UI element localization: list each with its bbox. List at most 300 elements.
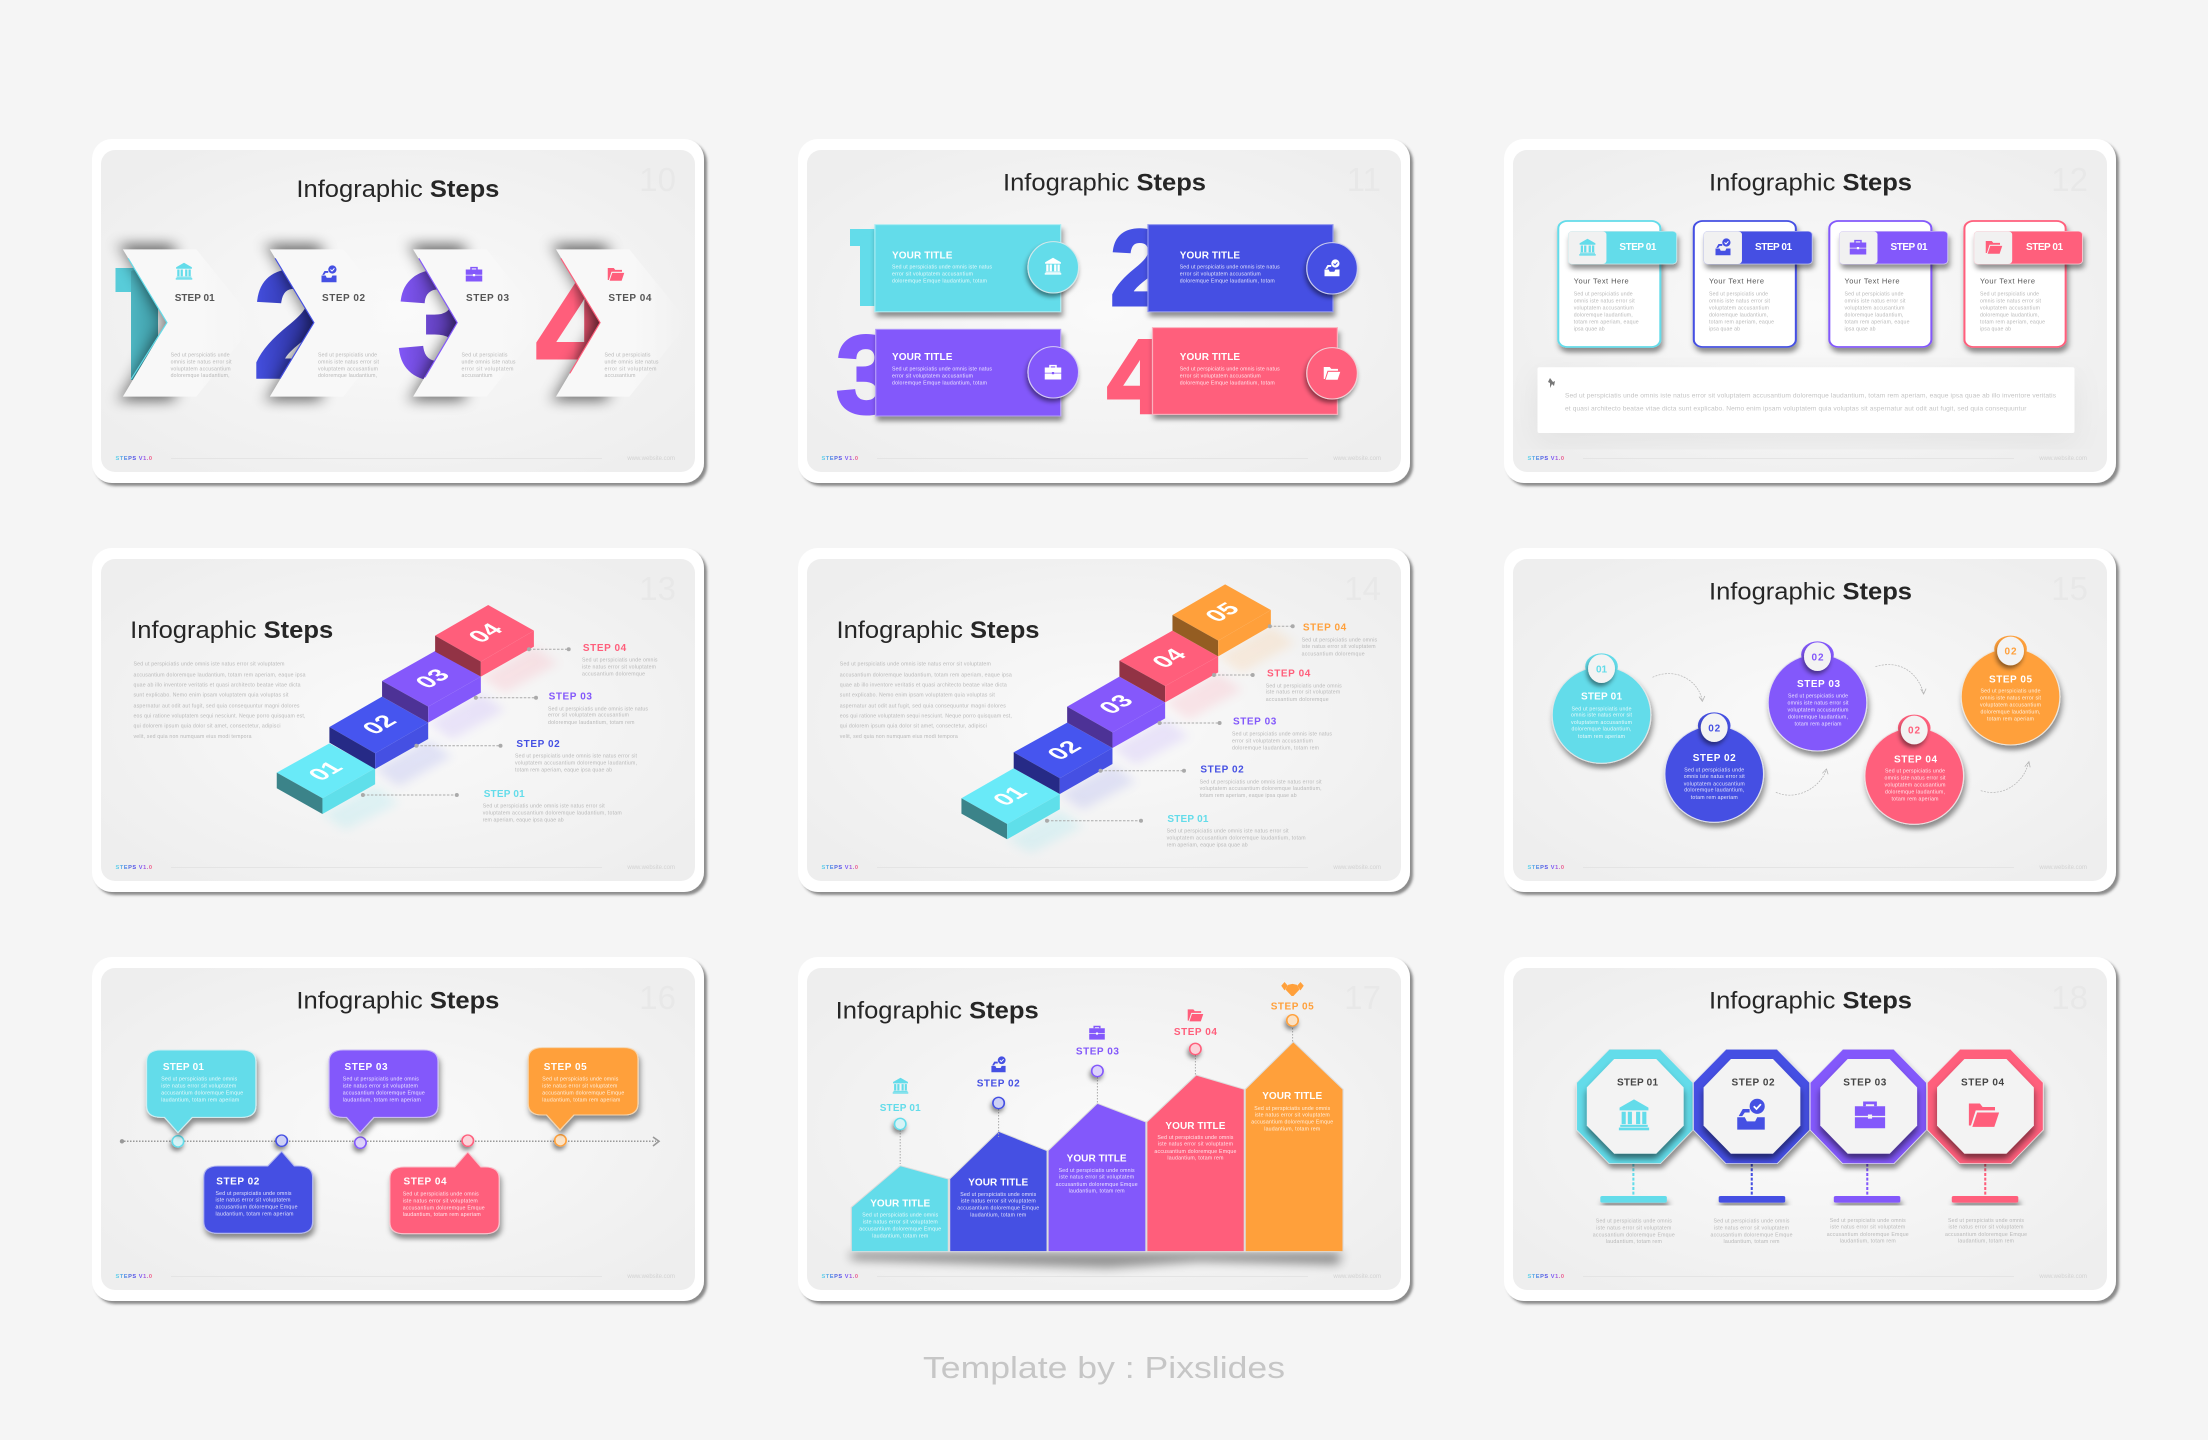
- panel: slide 14 isometric 5 steps: [798, 548, 1410, 892]
- circle 5: [1961, 636, 2060, 745]
- step 1 chevron: 1: [89, 233, 191, 439]
- step 3 chevron: [397, 240, 546, 411]
- step labels: STEP 03: [1233, 717, 1277, 728]
- box 4: error sit voluptatem accusantium: [1180, 373, 1261, 379]
- card frame: www.website.com: [2038, 865, 2087, 871]
- pins: [894, 1015, 1298, 1164]
- box 1: doloremque Emque laudantium, totam: [892, 279, 987, 285]
- callout step 05: STEP 05: [544, 1062, 587, 1073]
- step card 3: STEP 01: [1890, 242, 1928, 253]
- intro paragraph: quae ab illo inventore veritatis et quasi architecto beatae vitae dicta: [134, 682, 301, 688]
- step card 2: ipsa quae ab: [1709, 326, 1740, 332]
- step 2 chevron: omnis iste natus error sit: [318, 360, 380, 366]
- step 02 labels: iste natus error sit voluptatem: [961, 1199, 1036, 1205]
- step card 4: STEP 01: [2026, 242, 2063, 253]
- circle 5: totam rem aperiam: [1987, 717, 2034, 723]
- octagon 4: [1927, 1049, 2043, 1245]
- callout step 03: iste natus error sit voluptatem: [343, 1084, 418, 1090]
- step 03 labels: laudantium, totam rem: [1069, 1189, 1125, 1195]
- circle 3: omnis iste natus error sit: [1788, 701, 1849, 707]
- box 3: 3: [836, 314, 897, 437]
- step 01 labels: laudantium, totam rem: [872, 1234, 928, 1240]
- box 4: 4: [1107, 319, 1165, 436]
- circle 2: STEP 02: [1693, 753, 1736, 764]
- octagon 2: laudantium, totam rem: [1724, 1239, 1780, 1245]
- card frame: [798, 548, 1410, 892]
- callout step 05: laudantium, totam rem aperiam: [542, 1098, 620, 1104]
- step card 3: ipsa quae ab: [1844, 326, 1876, 332]
- step 1 chevron: STEP 01: [175, 293, 215, 304]
- intro paragraph: sunt explicabo. Nemo enim ipsam voluptatem quia voluptas sit: [840, 693, 995, 699]
- panel: slide 17 rising houses: [798, 957, 1410, 1301]
- callout step 01: iste natus error sit voluptatem: [161, 1084, 236, 1090]
- panel: slide 16 timeline callouts: [92, 957, 704, 1301]
- isometric staircase: 04: [463, 620, 510, 647]
- panel: slide 18 octagons: [1504, 957, 2116, 1301]
- step card 3: Sed ut perspiciatis unde: [1844, 292, 1904, 298]
- octagon 1: [1577, 1049, 1693, 1245]
- card frame: www.website.com: [2038, 1274, 2087, 1280]
- step 03 labels: accusantium doloremque Emque: [1056, 1182, 1138, 1188]
- step labels: totam rem aperiam, eaque ipsa quae ab: [1200, 793, 1297, 799]
- step card 2: omnis iste natus error sit: [1709, 299, 1771, 305]
- panel: slide 15 circles: [1504, 548, 2116, 892]
- isometric staircase: 02: [357, 711, 403, 738]
- step labels: accusantium doloremque: [582, 672, 645, 678]
- octagon 4: STEP 04: [1961, 1077, 2004, 1088]
- step 2 chevron: [252, 239, 402, 410]
- circle 3: doloremque laudantium,: [1788, 714, 1848, 720]
- circle 4: doloremque laudantium,: [1885, 789, 1945, 795]
- circle 3: Sed ut perspiciatis unde: [1788, 694, 1848, 700]
- timeline: [120, 1137, 659, 1146]
- box 1: 1: [831, 206, 902, 349]
- circle 2: Sed ut perspiciatis unde: [1684, 767, 1744, 773]
- step labels: STEP 04: [1267, 668, 1311, 679]
- isometric staircase: 01: [303, 758, 349, 785]
- box 2: [1110, 207, 1357, 328]
- octagon 3: accusantium doloremque Emque: [1827, 1232, 1909, 1238]
- step labels: rem aperiam, eaque ipsa quae ab: [1167, 843, 1248, 849]
- step 4 chevron: error sit voluptatem: [604, 366, 656, 372]
- step labels: [1167, 623, 1378, 849]
- step 1 chevron: Sed ut perspiciatis unde: [171, 352, 230, 358]
- callout step 04: [390, 1152, 499, 1234]
- intro paragraph: [134, 662, 306, 740]
- step card 2: [1694, 221, 1812, 347]
- step labels: error sit voluptatem accusantium: [548, 713, 629, 719]
- circle 2: voluptatem accusantium: [1684, 781, 1745, 787]
- step labels: Sed ut perspiciatis unde omnis: [582, 658, 658, 664]
- slide content: [1577, 987, 2043, 1245]
- step 01 labels: YOUR TITLE: [870, 1199, 931, 1210]
- circle 4: Sed ut perspiciatis unde: [1885, 769, 1945, 775]
- step 03 labels: STEP 03: [1076, 1047, 1119, 1058]
- step labels: Sed ut perspiciatis unde omnis iste natus: [1232, 732, 1332, 738]
- step card 1: doloremque laudantium,: [1574, 312, 1633, 318]
- circle 3: 02: [1812, 652, 1824, 663]
- step card 4: Sed ut perspiciatis unde: [1980, 292, 2039, 298]
- circle 2: omnis iste natus error sit: [1684, 774, 1745, 780]
- card frame: 10: [639, 161, 676, 198]
- step 02 labels: laudantium, totam rem: [970, 1213, 1026, 1219]
- callout step 02: STEP 02: [216, 1177, 260, 1188]
- step 2 chevron: doloremque laudantium,: [318, 373, 377, 379]
- circle 1: totam rem aperiam: [1578, 734, 1625, 740]
- step 03 labels: [1056, 1026, 1138, 1195]
- slide content: [836, 982, 1343, 1268]
- isometric staircase: 05: [1199, 599, 1246, 626]
- intro paragraph: Sed ut perspiciatis unde omnis iste natus error sit voluptatem: [840, 662, 991, 668]
- octagon 2: [1693, 1049, 1810, 1245]
- card frame: STEPS V1.0: [1528, 1274, 1564, 1280]
- step card 1: Your Text Here: [1574, 277, 1629, 286]
- step labels: [483, 643, 658, 824]
- step labels: Sed ut perspiciatis unde omnis: [1266, 683, 1342, 689]
- step labels: STEP 02: [1200, 764, 1244, 775]
- circle 4: totam rem aperiam: [1892, 797, 1938, 803]
- octagon 1: laudantium, totam rem: [1606, 1239, 1662, 1245]
- step 2 chevron: STEP 02: [322, 293, 365, 304]
- step labels: voluptatem accusantium doloremque laudantium, totam: [1167, 836, 1306, 842]
- step 02 labels: Sed ut perspiciatis unde omnis: [960, 1192, 1037, 1198]
- octagon 1: accusantium doloremque Emque: [1593, 1232, 1675, 1238]
- step card 1: [1558, 221, 1677, 347]
- card frame: [1504, 548, 2116, 892]
- box 4: YOUR TITLE: [1180, 352, 1240, 363]
- circle 5: voluptatem accusantium: [1980, 703, 2041, 709]
- box 4: doloremque Emque laudantium, totam: [1180, 381, 1275, 387]
- step card 1: omnis iste natus error sit: [1574, 299, 1635, 305]
- intro paragraph: velit, sed quia non numquam eius modi tempora: [134, 734, 252, 740]
- octagon 1: iste natus error sit voluptatem: [1596, 1225, 1671, 1231]
- step 1 chevron: voluptatem accusantium: [171, 366, 231, 372]
- step 3 chevron: accusantium: [462, 373, 492, 379]
- card frame: [798, 957, 1410, 1301]
- intro paragraph: qui dolorem ipsum quia dolor sit amet, consectetur, adipisci: [840, 724, 987, 730]
- step 01 labels: STEP 01: [880, 1103, 921, 1114]
- step 04 labels: [1154, 1009, 1237, 1162]
- box 1: error sit voluptatem accusantium: [892, 272, 973, 278]
- box 1: [850, 224, 1081, 320]
- circle 4: STEP 04: [1894, 754, 1937, 765]
- callout step 03: [329, 1050, 438, 1133]
- step 04 labels: STEP 04: [1174, 1027, 1217, 1038]
- title: Infographic Steps: [130, 617, 333, 644]
- panel: slide 13 isometric 4 steps: [92, 548, 704, 892]
- step 04 labels: laudantium, totam rem: [1167, 1156, 1223, 1162]
- footer credit: Template by : Pixslides: [923, 1350, 1285, 1385]
- circle 1: Sed ut perspiciatis unde: [1572, 706, 1632, 712]
- step 3 chevron: 3: [397, 240, 482, 411]
- step card 4: [1964, 221, 2082, 347]
- circle 5: 02: [2004, 647, 2017, 658]
- circle 1: omnis iste natus error sit: [1571, 713, 1633, 719]
- callout step 01: [147, 1050, 256, 1133]
- house shapes: [851, 1042, 1343, 1268]
- card frame: www.website.com: [2038, 456, 2087, 462]
- callout step 02: iste natus error sit voluptatem: [216, 1198, 290, 1204]
- box 1: YOUR TITLE: [892, 250, 953, 261]
- step card 2: Your Text Here: [1709, 277, 1764, 286]
- step labels: STEP 03: [549, 692, 592, 703]
- step 05 labels: YOUR TITLE: [1262, 1091, 1323, 1102]
- title: Infographic Steps: [1003, 170, 1206, 196]
- slide content: [120, 987, 659, 1234]
- octagon 3: iste natus error sit voluptatem: [1830, 1225, 1905, 1231]
- card frame: 13: [639, 570, 676, 607]
- step card 1: Sed ut perspiciatis unde: [1574, 292, 1633, 298]
- note box: et quasi architecto beatae vitae dicta sunt explicabo. Nemo enim ipsam voluptatem quia voluptas sit aspernatur aut odit aut fugit, sed quia consequuntur: [1565, 405, 2027, 412]
- step labels: accusantium doloremque: [1302, 651, 1365, 657]
- slide content: [831, 170, 1357, 437]
- box 2: YOUR TITLE: [1180, 250, 1240, 261]
- card frame: 14: [1344, 570, 1381, 607]
- title: Infographic Steps: [836, 997, 1039, 1024]
- step card 1: voluptatem accusantium: [1574, 306, 1634, 312]
- box 1: Sed ut perspiciatis unde omnis iste natus: [892, 265, 992, 271]
- step card 4: omnis iste natus error sit: [1980, 299, 2042, 305]
- isometric staircase: 02: [1041, 737, 1088, 764]
- step 05 labels: [1251, 982, 1333, 1133]
- octagon 2: iste natus error sit voluptatem: [1714, 1225, 1789, 1231]
- connectors: [1045, 624, 1295, 823]
- card frame: www.website.com: [1332, 865, 1381, 871]
- title: Infographic Steps: [836, 617, 1040, 644]
- step card 4: ipsa quae ab: [1980, 326, 2011, 332]
- callout step 03: Sed ut perspiciatis unde omnis: [343, 1077, 419, 1083]
- title: Infographic Steps: [296, 176, 499, 203]
- step card 2: voluptatem accusantium: [1709, 306, 1769, 312]
- callout step 05: accusantium doloremque Emque: [542, 1091, 624, 1097]
- card frame: 17: [1344, 979, 1381, 1016]
- step 2 chevron: Sed ut perspiciatis unde: [318, 352, 377, 358]
- title: Infographic Steps: [296, 987, 499, 1014]
- step card 2: totam rem aperiam, eaque: [1709, 320, 1774, 326]
- card frame: [1504, 139, 2116, 483]
- box 3: [836, 314, 1079, 437]
- octagon 3: STEP 03: [1843, 1077, 1887, 1088]
- step card 3: totam rem aperiam, eaque: [1844, 320, 1910, 326]
- card frame: STEPS V1.0: [116, 1274, 152, 1280]
- circle 1: 01: [1596, 664, 1607, 675]
- card frame: 18: [2051, 979, 2088, 1016]
- timeline markers: [172, 1135, 566, 1148]
- step 4 chevron: STEP 04: [608, 293, 652, 304]
- step card 3: Your Text Here: [1844, 277, 1900, 286]
- card frame: STEPS V1.0: [1528, 456, 1564, 462]
- callout step 01: laudantium, totam rem aperiam: [161, 1098, 239, 1104]
- circle 5: Sed ut perspiciatis unde: [1980, 689, 2041, 695]
- step card 1: totam rem aperiam, eaque: [1574, 320, 1639, 326]
- curved arrows: [1653, 665, 2030, 795]
- callout step 03: laudantium, totam rem aperiam: [343, 1098, 421, 1104]
- step card 1: ipsa quae ab: [1574, 326, 1605, 332]
- octagon 4: accusantium doloremque Emque: [1945, 1232, 2027, 1238]
- octagon 2: Sed ut perspiciatis unde omnis: [1714, 1219, 1790, 1225]
- step labels: STEP 04: [583, 643, 627, 654]
- intro paragraph: Sed ut perspiciatis unde omnis iste natus error sit voluptatem: [134, 662, 284, 668]
- octagon 4: iste natus error sit voluptatem: [1948, 1225, 2024, 1231]
- step 1 chevron: doloremque laudantium,: [171, 373, 230, 379]
- callout step 01: STEP 01: [163, 1062, 204, 1073]
- step labels: voluptatem accusantium doloremque laudantium,: [515, 761, 637, 767]
- step labels: Sed ut perspiciatis unde omnis iste natus error sit: [515, 754, 638, 760]
- box 2: 2: [1110, 207, 1170, 328]
- step 02 labels: STEP 02: [977, 1079, 1020, 1090]
- isometric staircase: 03: [410, 665, 456, 692]
- circle 2: doloremque laudantium,: [1684, 788, 1744, 794]
- step labels: doloremque laudantium, totam rem: [548, 720, 634, 726]
- box 3: doloremque Emque laudantium, totam: [892, 381, 987, 387]
- octagon 3: Sed ut perspiciatis unde omnis: [1830, 1218, 1906, 1224]
- circle 1: doloremque laudantium,: [1572, 727, 1632, 733]
- card frame: 16: [639, 979, 676, 1016]
- step 03 labels: iste natus error sit voluptatem: [1059, 1175, 1134, 1181]
- octagon 2: STEP 02: [1732, 1077, 1775, 1088]
- step labels: Sed ut perspiciatis unde omnis iste natus: [548, 706, 648, 712]
- slide content: [836, 584, 1378, 853]
- card frame: [92, 957, 704, 1301]
- card frame: 15: [2051, 570, 2088, 607]
- card frame: [92, 139, 704, 483]
- step card 1: STEP 01: [1619, 242, 1657, 253]
- step card 2: STEP 01: [1755, 242, 1792, 253]
- circle 2: [1665, 712, 1764, 822]
- step 03 labels: Sed ut perspiciatis unde omnis: [1059, 1168, 1135, 1174]
- intro paragraph: [840, 662, 1012, 740]
- step 01 labels: [859, 1078, 941, 1240]
- note box: Sed ut perspiciatis unde omnis iste natus error sit voluptatem accusantium doloremque laudantium, totam rem aperiam, eaque ipsa quae ab illo inventore veritatis: [1565, 393, 2057, 400]
- intro paragraph: sunt explicabo. Nemo enim ipsam voluptatem quia voluptas sit: [134, 693, 289, 699]
- circle 4: omnis iste natus error sit: [1884, 776, 1946, 782]
- callout step 04: STEP 04: [404, 1177, 447, 1188]
- panel: slide 11 numbered title boxes: [798, 139, 1410, 483]
- step 3 chevron: STEP 03: [466, 293, 509, 304]
- card frame: 12: [2051, 161, 2088, 198]
- circle 4: voluptatem accusantium: [1884, 783, 1946, 789]
- box 4: Sed ut perspiciatis unde omnis iste natus: [1180, 367, 1280, 373]
- octagon 1: STEP 01: [1617, 1077, 1658, 1088]
- step 4 chevron: accusantium: [604, 373, 636, 379]
- panel: slide 10 chevron steps: [89, 139, 704, 483]
- octagon 1: Sed ut perspiciatis unde omnis: [1596, 1219, 1672, 1225]
- octagon 3: [1810, 1049, 1926, 1245]
- box 3: error sit voluptatem accusantium: [892, 373, 973, 379]
- intro paragraph: accusantium doloremque laudantium, totam rem aperiam, eaque ipsa: [840, 672, 1012, 678]
- step 2 chevron: voluptatem accusantium: [318, 366, 378, 372]
- slide content: [112, 180, 658, 410]
- callout step 05: iste natus error sit voluptatem: [542, 1084, 617, 1090]
- step labels: iste natus error sit voluptatem: [1266, 690, 1340, 696]
- step 3 chevron: error sit voluptatem: [462, 366, 514, 372]
- step labels: rem aperiam, eaque ipsa quae ab: [483, 818, 564, 824]
- step labels: voluptatem accusantium doloremque laudantium, totam: [483, 811, 622, 817]
- panel: slide 12 step cards: [1504, 139, 2116, 483]
- card frame: STEPS V1.0: [822, 1274, 858, 1280]
- intro paragraph: quae ab illo inventore veritatis et quasi architecto beatae vitae dicta: [840, 682, 1007, 688]
- circle 3: [1768, 641, 1867, 751]
- card frame: www.website.com: [626, 456, 675, 462]
- circle 3: STEP 03: [1797, 679, 1840, 690]
- step 02 labels: accusantium doloremque Emque: [957, 1206, 1039, 1212]
- isometric staircase: 04: [1146, 645, 1193, 672]
- step card 4: totam rem aperiam, eaque: [1980, 320, 2045, 326]
- step 04 labels: Sed ut perspiciatis unde omnis: [1157, 1135, 1234, 1141]
- octagon 2: accusantium doloremque Emque: [1710, 1232, 1793, 1238]
- circle 1: [1552, 653, 1651, 763]
- step labels: STEP 02: [516, 739, 560, 750]
- step card 3: omnis iste natus error sit: [1844, 299, 1906, 305]
- callout step 02: accusantium doloremque Emque: [216, 1205, 298, 1211]
- step labels: iste natus error sit voluptatem: [582, 665, 656, 671]
- circle 4: 02: [1908, 726, 1920, 737]
- callout step 03: STEP 03: [344, 1062, 388, 1073]
- note box: [1538, 367, 2074, 433]
- box 2: Sed ut perspiciatis unde omnis iste natus: [1180, 265, 1280, 271]
- slide content: [130, 605, 658, 830]
- step 05 labels: laudantium, totam rem: [1264, 1127, 1320, 1133]
- callout step 04: laudantium, totam rem aperiam: [403, 1212, 481, 1218]
- step 01 labels: iste natus error sit voluptatem: [863, 1220, 938, 1226]
- step 01 labels: Sed ut perspiciatis unde omnis: [862, 1213, 939, 1219]
- circle 5: STEP 05: [1989, 674, 2032, 685]
- step 05 labels: accusantium doloremque Emque: [1251, 1120, 1333, 1126]
- title: Infographic Steps: [1709, 987, 1912, 1014]
- callout step 02: Sed ut perspiciatis unde omnis: [216, 1191, 292, 1197]
- circle 1: voluptatem accusantium: [1571, 720, 1632, 726]
- step 05 labels: Sed ut perspiciatis unde omnis: [1254, 1106, 1331, 1112]
- step labels: iste natus error sit voluptatem: [1302, 644, 1376, 650]
- circle 3: voluptatem accusantium: [1788, 708, 1848, 714]
- card frame: STEPS V1.0: [822, 865, 858, 871]
- step labels: STEP 01: [484, 789, 525, 800]
- card frame: www.website.com: [1332, 456, 1381, 462]
- step 4 chevron: Sed ut perspiciatis: [604, 352, 651, 358]
- step card 4: Your Text Here: [1980, 277, 2035, 286]
- circle 5: doloremque laudantium,: [1980, 709, 2040, 715]
- box 3: YOUR TITLE: [892, 352, 953, 363]
- step 2 chevron: 2: [252, 239, 338, 410]
- step labels: accusantium doloremque: [1266, 697, 1329, 703]
- step labels: voluptatem accusantium doloremque laudantium,: [1200, 786, 1322, 792]
- callout step 05: [528, 1048, 638, 1130]
- step card 3: [1829, 221, 1948, 347]
- step 05 labels: STEP 05: [1271, 1002, 1314, 1013]
- circle 4: [1865, 715, 1964, 824]
- circle 2: totam rem aperiam: [1691, 795, 1738, 801]
- callout step 05: Sed ut perspiciatis unde omnis: [542, 1077, 619, 1083]
- circle 5: omnis iste natus error sit: [1980, 696, 2042, 702]
- box 2: doloremque Emque laudantium, totam: [1180, 279, 1275, 285]
- card frame: STEPS V1.0: [822, 456, 858, 462]
- title: Infographic Steps: [1709, 170, 1912, 196]
- isometric staircase: [277, 605, 558, 830]
- callout step 01: accusantium doloremque Emque: [161, 1091, 243, 1097]
- step labels: error sit voluptatem accusantium: [1232, 738, 1313, 744]
- isometric staircase: [961, 584, 1295, 853]
- box 4: [1107, 319, 1357, 436]
- step 02 labels: [957, 1056, 1039, 1219]
- step 4 chevron: unde omnis iste natus: [604, 360, 659, 366]
- step 05 labels: iste natus error sit voluptatem: [1255, 1113, 1330, 1119]
- box 3: Sed ut perspiciatis unde omnis iste natus: [892, 367, 992, 373]
- card frame: STEPS V1.0: [1528, 865, 1564, 871]
- callout step 03: accusantium doloremque Emque: [343, 1091, 425, 1097]
- box 2: error sit voluptatem accusantium: [1180, 272, 1261, 278]
- intro paragraph: accusantium doloremque laudantium, totam rem aperiam, eaque ipsa: [134, 672, 306, 678]
- step card 2: Sed ut perspiciatis unde: [1709, 292, 1768, 298]
